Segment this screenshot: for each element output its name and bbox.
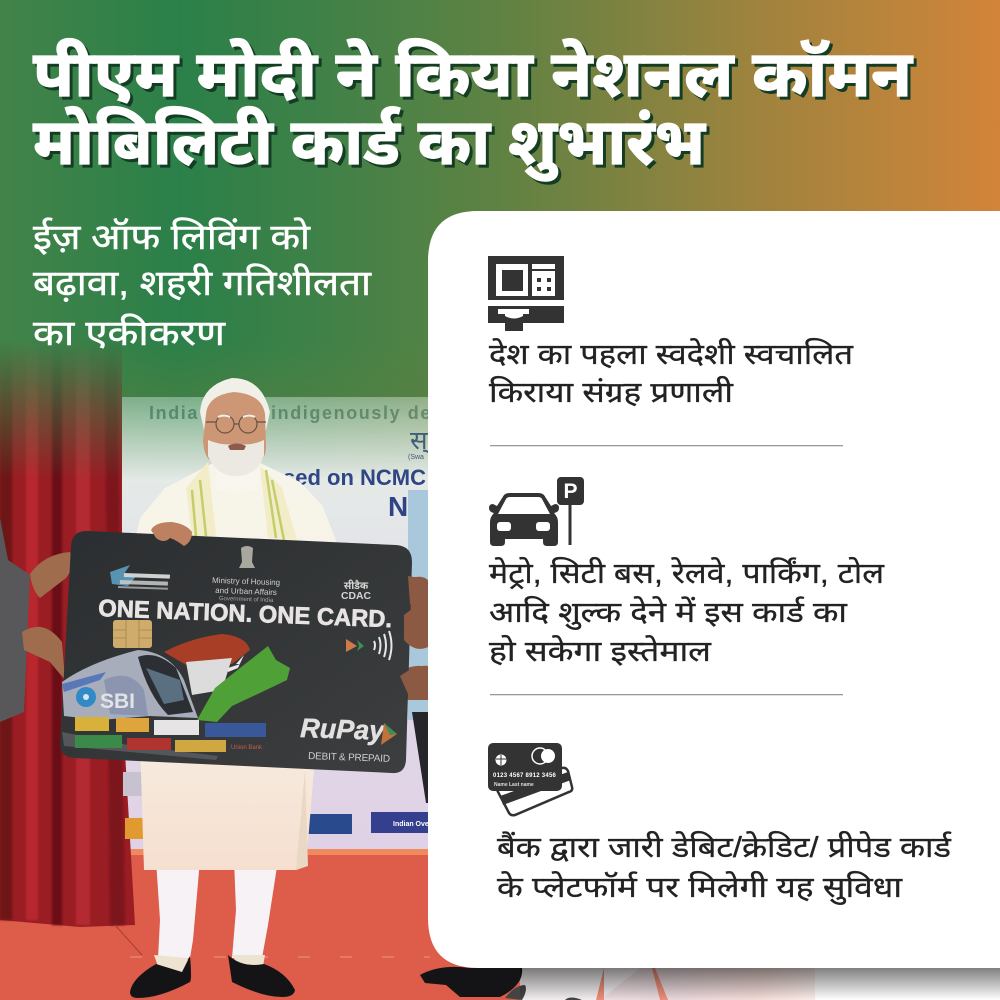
big card [60,531,412,773]
card: ministry text [212,576,280,604]
bank logos strip [123,772,429,839]
card: slogan: ONE NATION. ONE CARD. [98,595,393,633]
stage wall [120,397,440,849]
icon: bank cards: 0123 4567 8912 3456 [493,773,557,779]
text: first feature: किराया संग्रह प्रणाली [489,376,734,409]
card: cdac [341,580,371,602]
floor seam [130,956,430,958]
text: first feature: देश का पहला स्वदेशी स्वचालित [489,338,854,371]
subtitle: का एकीकरण [33,313,226,353]
icon: ticket machine [488,256,564,331]
text: second feature: मेट्रो, सिटी बस, रेलवे, पार्किंग, टोल [489,557,885,590]
top gradient [0,0,1000,480]
legs [156,860,200,958]
backdrop text: indigenously de [271,403,432,423]
card: ministry text: and Urban Affairs [215,586,277,597]
text: third feature: के प्लेटफॉर्म पर मिलेगी यह सुविधा [497,871,903,905]
card: train [62,650,218,760]
hands on card edges [151,522,430,696]
card: ministry text: Government of India [219,596,274,604]
text: third feature: बैंक द्वारा जारी डेबिट/क्रेडिट/ प्रीपेड कार्ड [497,831,952,864]
collar [216,470,260,492]
backdrop text: sed on NCMC [283,465,426,490]
title: पीएम मोदी ने किया नेशनल कॉमन [36,41,917,113]
person left edge [0,518,72,722]
backdrop text: स् [410,425,432,456]
card: contactless [374,631,392,660]
card: train: SBI [100,690,135,713]
icon: car and parking sign [489,477,584,546]
panel: features [428,211,1000,968]
text: second feature: आदि शुल्क देने में इस कार्ड का [489,596,848,630]
title: पीएम मोदी ने किया नेशनल कॉमन [33,38,914,110]
subtitle: बढ़ावा, शहरी गतिशीलता [33,263,372,303]
card: bank logos [75,717,266,752]
backdrop text: Na [388,491,424,522]
text: second feature: हो सकेगा इस्तेमाल [489,635,712,668]
shoes [130,956,191,998]
subtitle: ईज़ ऑफ लिविंग को [33,217,311,257]
curtain [0,280,135,927]
icon: bank cards [488,743,572,815]
card: splash art [164,634,290,722]
bottom strip [420,967,1000,1000]
sash [186,462,216,536]
card: bank logos: Union Bank [231,745,263,751]
card: bel logo [110,565,170,590]
backdrop text: India [149,403,199,423]
card: cdac: सीडैक [344,580,369,592]
title: मोबिलिटी कार्ड का शुभारंभ [33,106,706,182]
card: cdac: CDAC [341,591,371,602]
big card: DEBIT & PREPAID [308,751,390,765]
bank logos strip: Indian Ove [393,821,429,828]
card: emblem [239,546,255,568]
card: ministry text: Ministry of Housing [212,576,280,587]
main figure [130,378,336,998]
person right edge [402,490,430,803]
head [200,378,270,430]
icon: car and parking sign: P [563,480,578,503]
title [33,38,917,185]
text: second feature [489,557,885,668]
backdrop text: (Swa [408,454,424,461]
text: first feature [489,338,854,409]
title: मोबिलिटी कार्ड का शुभारंभ [36,109,709,185]
icon: bank cards: Name Last name [494,782,534,788]
card: rupay logo: RuPay [300,713,387,746]
card: chip [113,620,152,648]
photo background [0,280,1000,1000]
kurta [134,462,336,870]
backdrop text [149,403,432,522]
text: third feature [497,831,952,905]
subtitle [33,217,372,353]
